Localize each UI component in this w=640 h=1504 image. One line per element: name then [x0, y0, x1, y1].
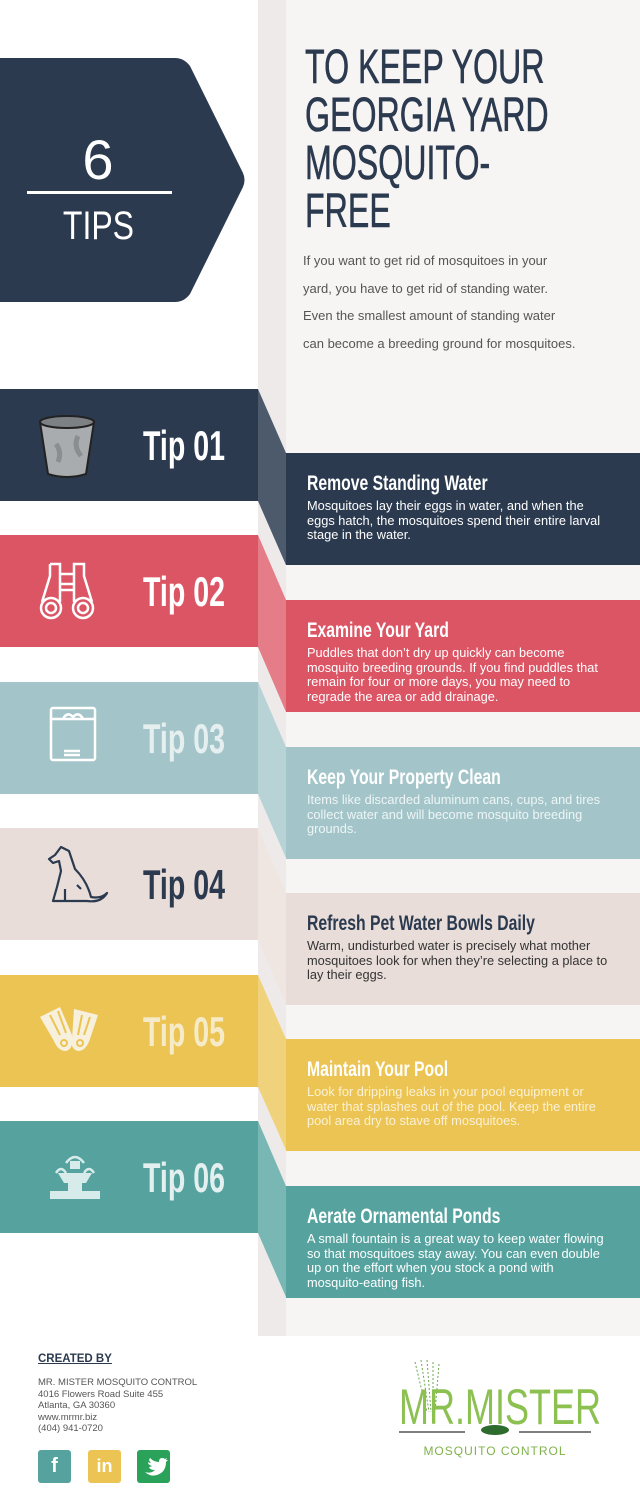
title — [305, 41, 549, 238]
icon: bucket — [38, 415, 96, 478]
footer: created by: CREATED BY — [38, 1353, 112, 1365]
tip 05 band — [0, 975, 258, 1087]
social icons — [38, 1450, 170, 1483]
address: www.mrmr.biz — [38, 1412, 97, 1422]
tip 01 text — [286, 453, 640, 565]
logo: MR.MISTER — [399, 1379, 601, 1435]
footer: created by — [38, 1353, 197, 1434]
address: (404) 941-0720 — [38, 1423, 103, 1434]
intro paragraph — [303, 253, 575, 350]
icon: facebook: f — [51, 1455, 58, 1477]
title: MOSQUITO- — [305, 137, 490, 190]
icon: binoculars — [40, 562, 94, 620]
tip 04 band — [0, 828, 258, 940]
tip 02 band: Tip 02 — [143, 568, 225, 615]
intro paragraph: Even the smallest amount of standing water — [303, 308, 555, 323]
label TIPS: TIPS — [62, 204, 134, 248]
tip 04 band: Tip 04 — [143, 861, 225, 908]
icon: fountain — [50, 1156, 100, 1199]
tip 02 text: Puddles that don’t dry up quickly can become mosquito breeding grounds. If you find puddles that remain for four or more days, you may need to regrade the area or add drainage. — [307, 645, 598, 704]
tip 03 band: Tip 03 — [143, 715, 225, 762]
header badge: 6 tips — [0, 58, 244, 302]
tip 05 band: Tip 05 — [143, 1008, 225, 1055]
tip 03 text — [286, 747, 640, 859]
tip 02 band — [0, 535, 258, 647]
folds — [258, 389, 286, 1297]
tip 06 band — [0, 1121, 258, 1233]
title: GEORGIA YARD — [305, 89, 549, 142]
tip 02 text: Examine Your Yard — [307, 619, 449, 642]
address: 4016 Flowers Road Suite 455 — [38, 1388, 163, 1400]
icon: twitter — [137, 1450, 170, 1483]
tip 05 text: Maintain Your Pool — [307, 1058, 448, 1081]
tip 03 text: Items like discarded aluminum cans, cups, and tires collect water and will become mosquito breeding grounds. — [307, 792, 600, 836]
icon: dog — [48, 846, 108, 902]
tip 04 text — [286, 893, 640, 1005]
tip 05 text: Look for dripping leaks in your pool equipment or water that splashes out of the pool. Keep the entire pool area dry to stave off mosquitoes. — [307, 1084, 596, 1128]
icon: trash bin — [50, 706, 96, 762]
icon: flippers — [40, 1007, 98, 1051]
title: TO KEEP YOUR — [305, 41, 545, 94]
icon: linkedin — [88, 1450, 121, 1483]
tip 06 text: Aerate Ornamental Ponds — [307, 1205, 500, 1228]
tip 01 text: Mosquitoes lay their eggs in water, and when the eggs hatch, the mosquitoes spend their entire larval stage in the water. — [307, 498, 600, 542]
number 6: 6 — [82, 128, 114, 191]
title: FREE — [305, 185, 391, 238]
intro paragraph: yard, you have to get rid of standing water. — [303, 280, 548, 296]
tip 05 text — [286, 1039, 640, 1151]
tip 01 text: Remove Standing Water — [307, 472, 488, 495]
intro paragraph: can become a breeding ground for mosquitoes. — [303, 336, 575, 350]
tip 06 band: Tip 06 — [143, 1154, 225, 1201]
address: Atlanta, GA 30360 — [38, 1400, 115, 1411]
background column — [258, 0, 640, 1336]
logo subtitle: MOSQUITO CONTROL — [423, 1444, 567, 1458]
tip 02 text — [286, 600, 640, 712]
tip 04 text: Refresh Pet Water Bowls Daily — [307, 912, 535, 935]
icon: facebook — [38, 1450, 71, 1483]
address — [38, 1377, 197, 1434]
address: MR. MISTER MOSQUITO CONTROL — [38, 1377, 197, 1388]
tip 06 text: A small fountain is a great way to keep water flowing so that mosquitoes stay away. You can even double up on the effort when you stock a pond with mosquito-eating fish. — [307, 1231, 604, 1290]
logo — [399, 1360, 601, 1458]
icon: linkedin: in — [96, 1456, 112, 1476]
label: Tip 01 — [143, 422, 225, 469]
tip 03 band — [0, 682, 258, 794]
tip 01 band — [0, 389, 258, 501]
tip 04 text: Warm, undisturbed water is precisely what mother mosquitoes look for when they’re selecting a place to lay their eggs. — [307, 938, 607, 982]
tip 03 text: Keep Your Property Clean — [307, 766, 501, 789]
tip 06 text — [286, 1186, 640, 1298]
intro paragraph: If you want to get rid of mosquitoes in your — [303, 253, 547, 268]
